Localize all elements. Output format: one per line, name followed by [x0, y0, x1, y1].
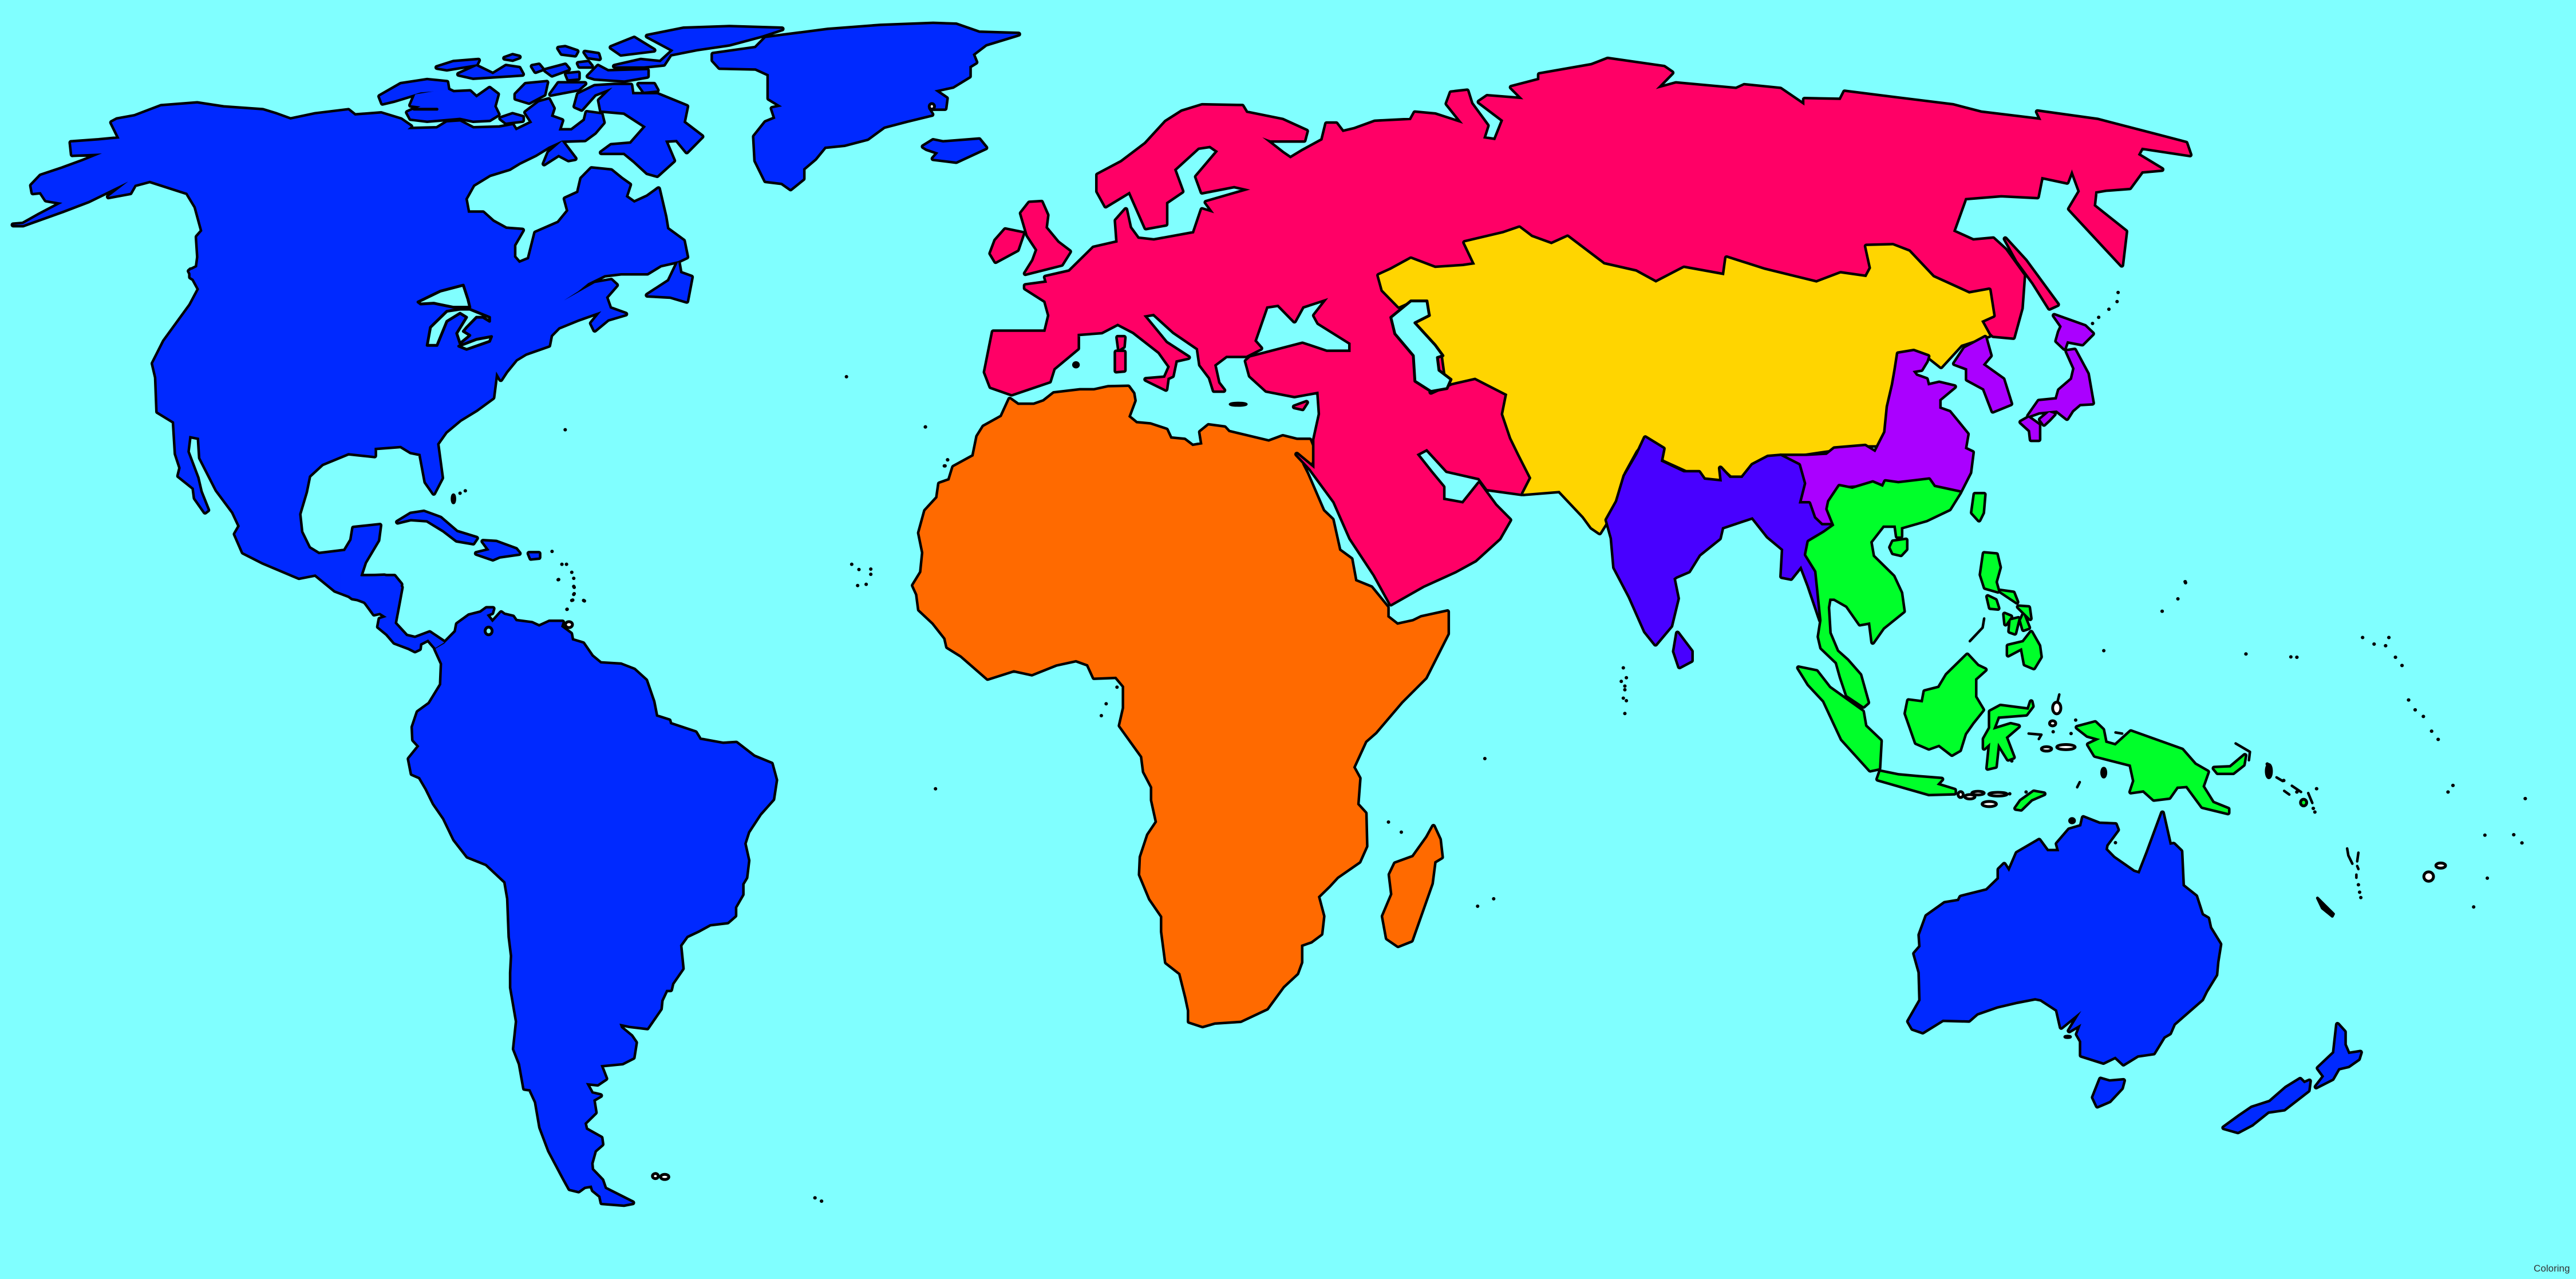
region: East Asia (purple) [1781, 315, 2092, 526]
region: South Asia (indigo) [1607, 438, 1834, 667]
region: Europe, Russia and Middle East (pink) [985, 59, 2190, 604]
region: Southeast Asia (green) [1799, 480, 2245, 813]
region: Africa and Madagascar (orange) [914, 387, 1448, 1026]
region: Central Asia (yellow) [1379, 228, 1993, 533]
Great Lakes [414, 109, 492, 349]
small outlined islands [452, 104, 2445, 1179]
region: Australia and New Zealand (blue) [1909, 813, 2360, 1132]
Caspian Sea [1391, 301, 1451, 392]
region: North and South America, Greenland (blue) [13, 24, 1018, 1205]
thin island chains [1970, 618, 2358, 878]
tiny island dots [460, 293, 2525, 1201]
credit text: Coloring [2534, 1263, 2570, 1274]
